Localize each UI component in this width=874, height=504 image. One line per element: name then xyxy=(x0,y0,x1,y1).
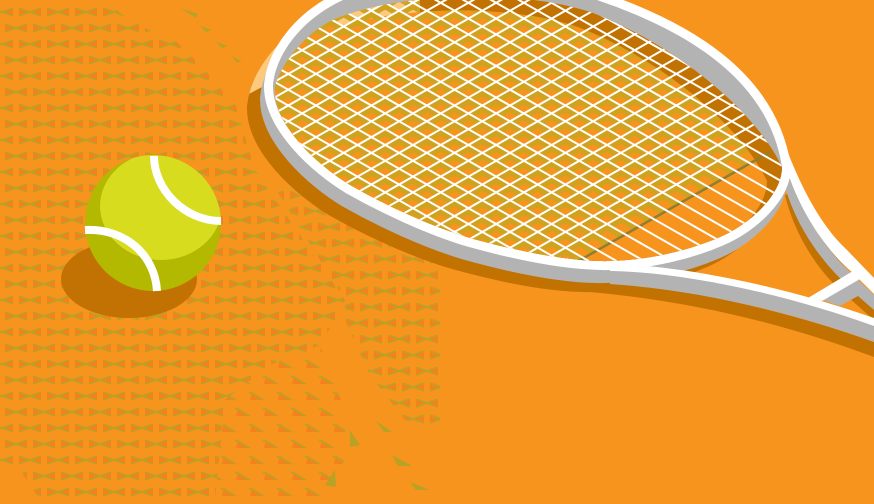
racket handle: throat upper rail xyxy=(785,145,874,310)
shadow on string bed xyxy=(420,0,782,262)
strings xyxy=(275,0,782,261)
ball seams xyxy=(85,156,221,291)
crossbar xyxy=(808,271,860,301)
long string shadow line xyxy=(575,152,770,263)
ball shadow xyxy=(61,240,197,318)
racket shadow xyxy=(247,45,874,357)
court texture: woven pattern xyxy=(0,0,450,504)
racket handle: bottom rail xyxy=(610,264,874,342)
racket head: rim wall xyxy=(269,0,778,274)
racket head: white rim xyxy=(273,0,782,261)
string shadows xyxy=(274,0,752,260)
racket head: inner wall xyxy=(273,0,782,261)
ball highlight xyxy=(100,152,222,260)
racket head: string bed xyxy=(274,0,782,262)
tennis ball xyxy=(85,152,222,291)
